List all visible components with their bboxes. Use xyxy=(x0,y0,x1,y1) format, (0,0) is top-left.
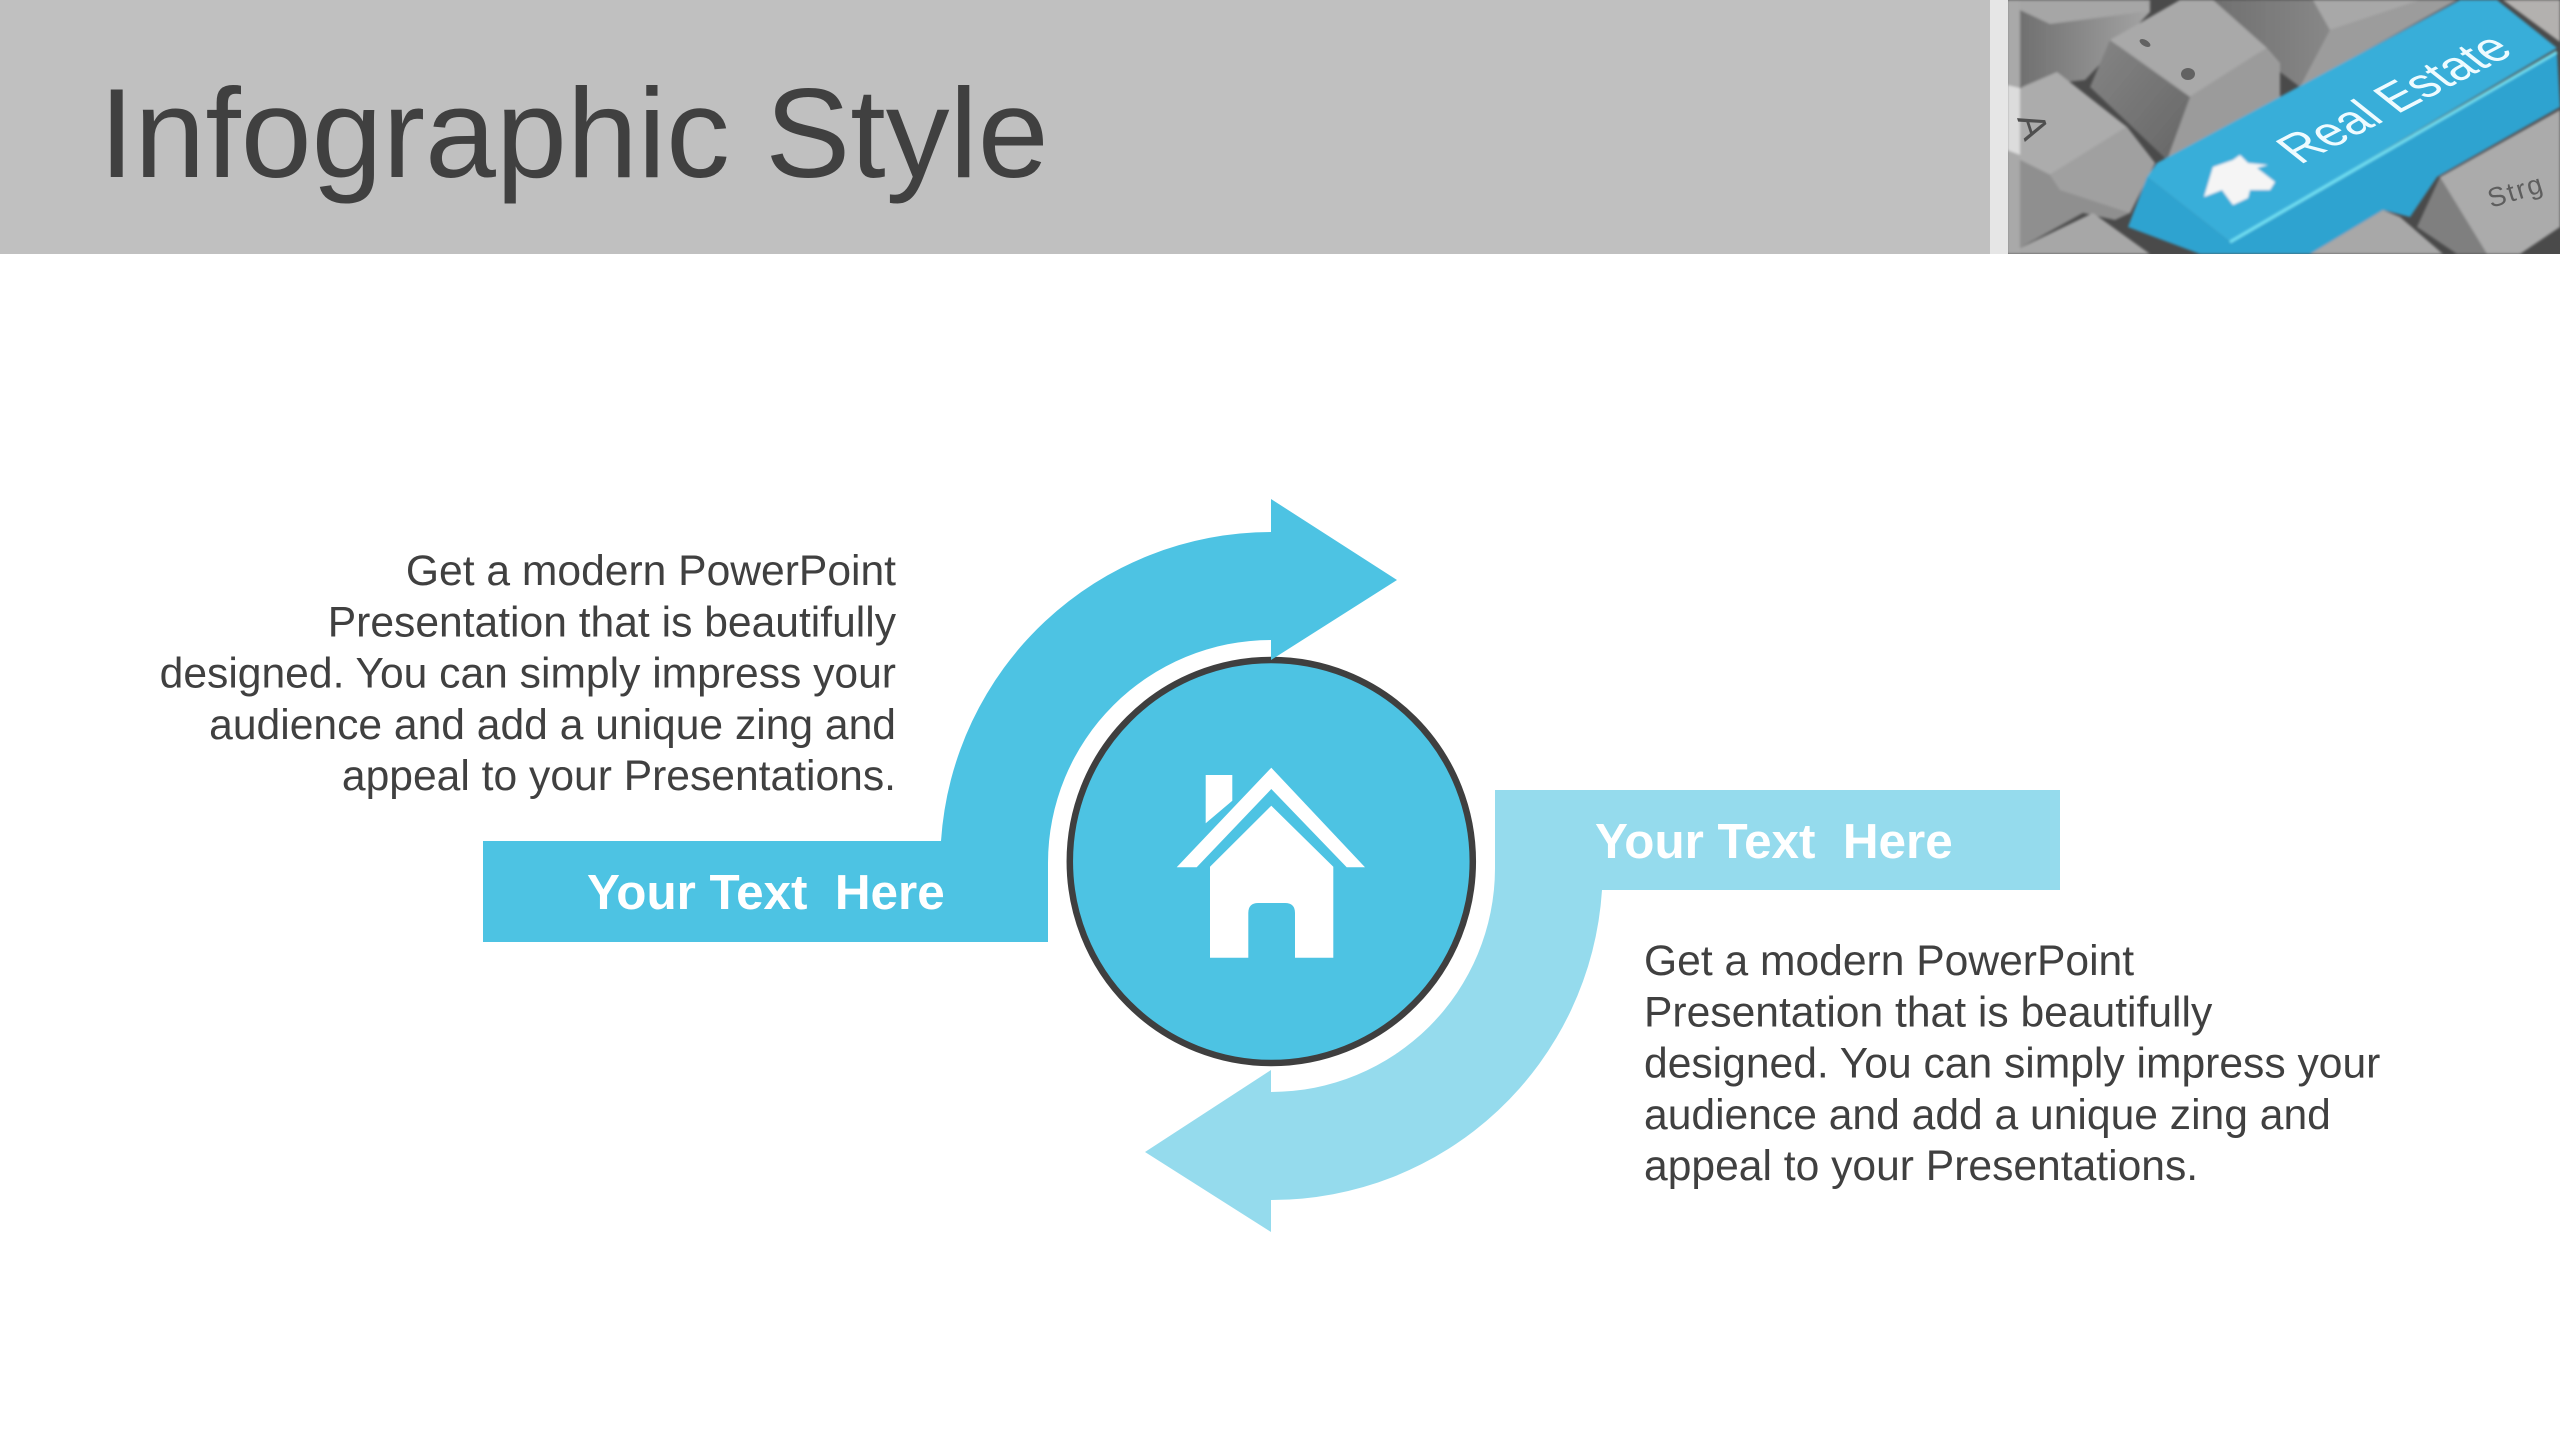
text block: left description: Get a modern PowerPoint xyxy=(406,547,896,595)
text block: right description: appeal to your Presentations. xyxy=(1644,1142,2198,1190)
text block: right description: designed. You can simply impress your xyxy=(1644,1040,2380,1088)
text block: left description: designed. You can simply impress your xyxy=(160,650,896,698)
key legend: Real Estate: Real Estate xyxy=(2264,24,2524,172)
icon: house xyxy=(1177,768,1365,958)
text block: right description: Presentation that is beautifully xyxy=(1644,988,2213,1036)
text block: right description: Get a modern PowerPoint xyxy=(1644,937,2134,985)
text block: left description xyxy=(160,547,897,800)
title: Infographic Style xyxy=(99,63,1049,205)
text block: left description: appeal to your Presentations. xyxy=(342,752,896,800)
arrow: light blue curved arrow with label bar xyxy=(1145,790,2060,1232)
text block: right description: audience and add a unique zing and xyxy=(1644,1091,2331,1139)
center circle xyxy=(1070,660,1473,1063)
text block: right description xyxy=(1644,937,2380,1190)
key legend: Strg: Strg xyxy=(2484,168,2548,214)
key glyphs xyxy=(2138,37,2195,80)
keyboard photo xyxy=(2007,0,2560,254)
text block: left description: audience and add a unique zing and xyxy=(209,701,896,749)
arrow: dark blue curved arrow with label bar xyxy=(483,499,1397,942)
key legend: A: A xyxy=(2008,108,2056,146)
light strip beside photo xyxy=(1990,0,2008,254)
text block: left description: Presentation that is beautifully xyxy=(328,598,897,646)
label: left bar: Your Text Here xyxy=(587,865,945,920)
label: right bar: Your Text Here xyxy=(1595,814,1953,869)
header band xyxy=(0,0,2560,254)
